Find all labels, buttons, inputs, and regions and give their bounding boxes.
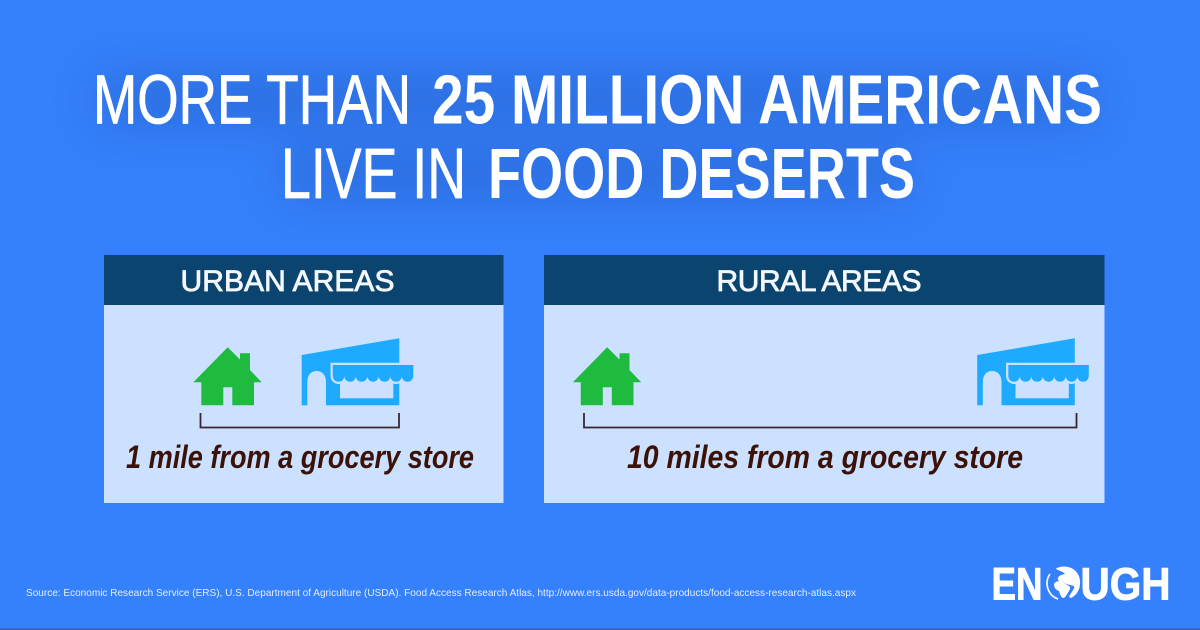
logo: ENOUGH — [992, 558, 1170, 610]
logo letters UGH: UGH — [1080, 558, 1170, 610]
source note: Source: Economic Research Service (ERS), U.S. Department of Agriculture (USDA). Food Access Research Atlas, http://www.ers.usda.gov/data-products/food-access-research-atlas.aspx — [26, 587, 857, 599]
distance bracket — [200, 413, 399, 428]
distance label: 1 mile from a grocery store — [126, 439, 474, 475]
logo globe — [1047, 566, 1080, 599]
title line 2: LIVE IN — [281, 135, 466, 214]
icon: grocery store — [302, 338, 413, 406]
icon: grocery store — [977, 338, 1089, 406]
panel: urban areas — [104, 255, 504, 503]
logo letters EN: EN — [992, 558, 1042, 610]
panel header — [544, 255, 1104, 305]
panel: rural areas — [544, 255, 1104, 503]
heading: rural areas: RURAL AREAS — [716, 265, 922, 298]
title glow — [100, 78, 1090, 196]
distance bracket — [584, 413, 1076, 428]
title line 1: MORE THAN — [93, 60, 411, 138]
panel body — [544, 305, 1104, 503]
distance label: 10 miles from a grocery store — [627, 439, 1023, 475]
icon: house — [193, 347, 262, 405]
heading: urban areas: URBAN AREAS — [180, 265, 394, 298]
panel header — [104, 255, 504, 305]
icon: house — [573, 347, 641, 405]
panel body — [104, 305, 504, 503]
title line 2: FOOD DESERTS — [488, 135, 915, 214]
title — [93, 60, 1102, 214]
